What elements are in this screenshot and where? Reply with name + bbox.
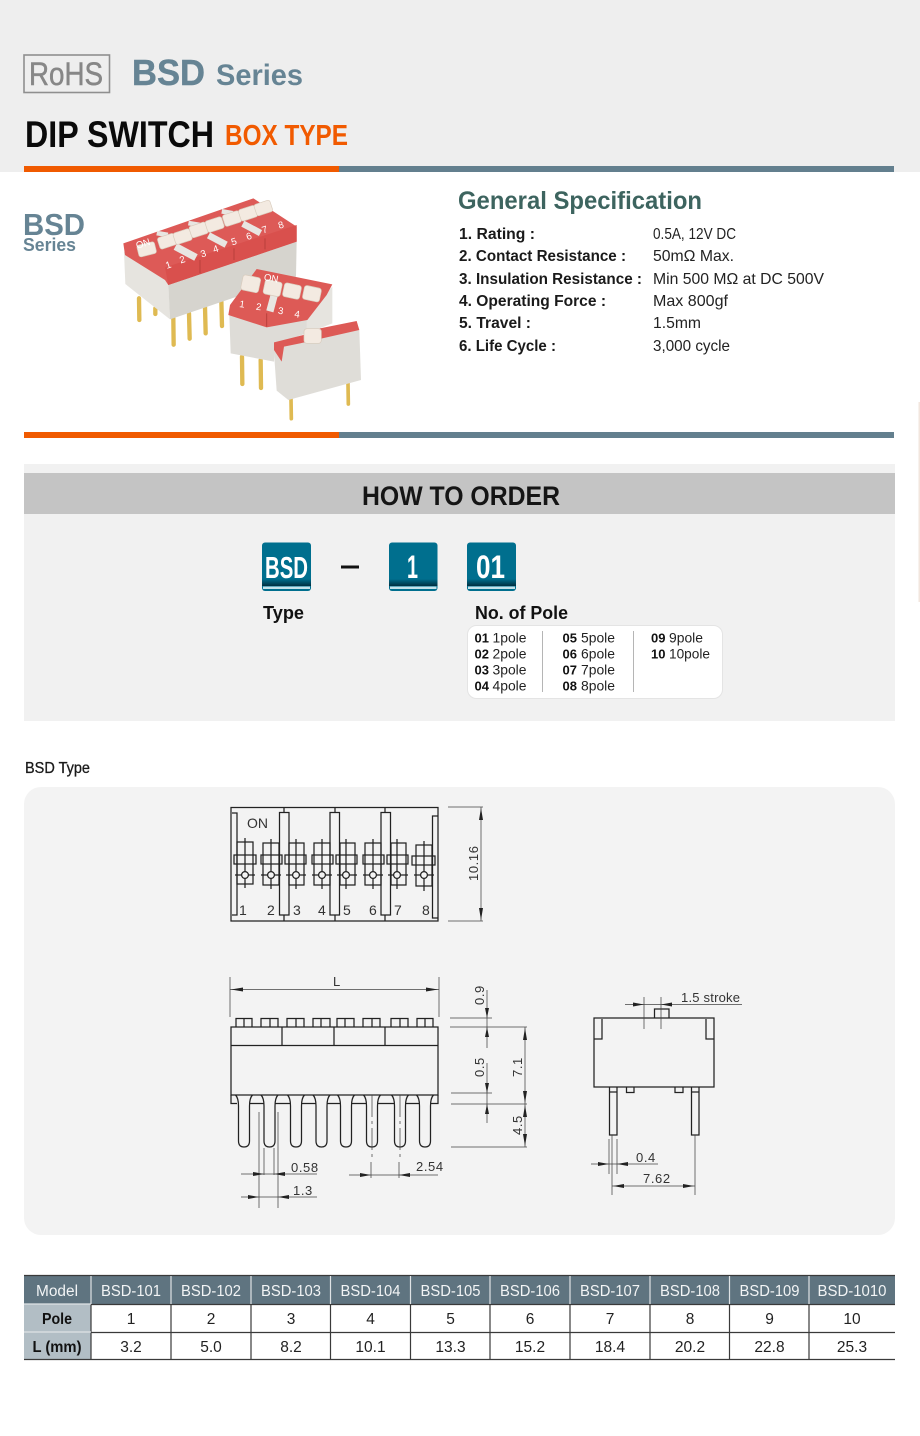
code box: 1 [389, 542, 438, 591]
product photo: DIP switches: 2 [178, 254, 187, 266]
row: L (mm): 25.3 [837, 1339, 867, 1356]
row: Pole: 5 [446, 1311, 455, 1328]
spec row 5 [459, 315, 701, 332]
row: L (mm): 22.8 [754, 1339, 785, 1356]
row: Pole: 2 [207, 1311, 215, 1328]
spec row 6: 3,000 cycle [653, 338, 730, 355]
row: Model: BSD-107 [580, 1283, 640, 1300]
spec row 3: Min 500 MΩ at DC 500V [653, 271, 824, 288]
row: Pole: 7 [606, 1311, 614, 1328]
code box: BSD: BSD [265, 550, 308, 585]
pole list: 5pole [581, 630, 615, 646]
spec row 4 [459, 293, 729, 310]
spec row 6 [459, 338, 730, 355]
switch numbers: 8 [422, 902, 430, 918]
drawing: top view [231, 807, 483, 921]
pole list: 03 [474, 662, 489, 678]
pole list: 10 [651, 646, 665, 662]
row: Pole: 3 [287, 1311, 295, 1328]
product photo: DIP switches: 6 [245, 231, 253, 243]
spec row 1: 0.5A, 12V DC [653, 226, 736, 243]
series subtitle: Series [216, 59, 303, 92]
dimension 7.62 [612, 1135, 695, 1195]
spec row 5: 5. Travel : [459, 315, 531, 332]
row: L (mm): 10.1 [355, 1339, 386, 1356]
large switch pins [139, 298, 222, 345]
product photo: DIP switches: 3 [277, 306, 284, 317]
switch numbers [239, 902, 430, 918]
spec heading: General Specification [458, 187, 702, 215]
side label: BSD Series: BSD [23, 207, 85, 242]
spec row 5: 1.5mm [653, 315, 701, 332]
pole list: 02 [474, 646, 489, 662]
dimension 0.4: 0.4 [636, 1150, 656, 1165]
switch numbers: 6 [369, 902, 377, 918]
row: L (mm): 8.2 [280, 1339, 302, 1356]
drawing: front view [230, 974, 527, 1208]
pole list: 8pole [581, 678, 615, 694]
row: Model: BSD-109 [740, 1283, 800, 1300]
label: Type: Type [263, 603, 304, 623]
spec row 2: 50mΩ Max. [653, 248, 734, 265]
pole list: 2pole [492, 646, 527, 662]
label: No. of Pole: No. of Pole [475, 603, 568, 623]
switch numbers: 2 [267, 902, 275, 918]
dimensions right [450, 985, 527, 1147]
dimensions right: 7.1 [510, 1057, 525, 1077]
spec row 1: 1. Rating : [459, 226, 535, 243]
series title: BSD [132, 52, 205, 93]
label ON: ON [247, 815, 268, 831]
pole list: 4pole [492, 678, 527, 694]
switches [234, 838, 435, 891]
code box: 1: 1 [407, 549, 418, 585]
side label: BSD Series: Series [23, 235, 76, 255]
switch numbers: 5 [343, 902, 351, 918]
dimensions bottom: 2.54 [416, 1159, 444, 1174]
dimensions right: 4.5 [510, 1115, 525, 1135]
product photo: DIP switches: ON [135, 237, 152, 252]
dimension L: L [333, 974, 341, 989]
code box: 01 [467, 542, 516, 591]
row: Pole: 9 [765, 1311, 774, 1328]
heading: BSD Type: BSD Type [25, 760, 90, 777]
pole list: 07 [562, 662, 577, 678]
product photo: DIP switches: 7 [261, 224, 269, 236]
drawing: side view [591, 990, 742, 1195]
row: Model: BSD-1010 [818, 1283, 887, 1300]
row: Pole: Pole [42, 1311, 72, 1328]
row: L (mm): 18.4 [595, 1339, 625, 1356]
panel: general specification [458, 187, 824, 355]
product photo: DIP switches: 5 [230, 236, 238, 248]
row: Model: BSD-106 [500, 1283, 560, 1300]
row: Pole: 4 [366, 1311, 375, 1328]
spec row 3 [459, 271, 824, 288]
row: Model: BSD-103 [261, 1283, 321, 1300]
dimensions right: 0.9 [472, 985, 487, 1005]
spec row 2: 2. Contact Resistance : [459, 248, 626, 265]
row: L (mm): 13.3 [435, 1339, 466, 1356]
row: L (mm) [32, 1339, 867, 1356]
dimensions bottom: 0.58 [291, 1160, 319, 1175]
table grid [24, 1276, 895, 1360]
dimension 10.16: 10.16 [466, 845, 481, 881]
pins [236, 1095, 434, 1147]
row: Pole: 6 [526, 1311, 534, 1328]
row: Model: BSD-105 [420, 1283, 480, 1300]
dimension stroke: 1.5 stroke [681, 990, 740, 1005]
row: L (mm): 5.0 [200, 1339, 222, 1356]
dimension 0.4 [591, 1139, 658, 1174]
spec row 3: 3. Insulation Resistance : [459, 271, 642, 288]
pole list [468, 626, 722, 698]
dimensions bottom [241, 1112, 444, 1208]
dash [341, 566, 359, 568]
dimension L [230, 974, 439, 1017]
section rule [24, 432, 894, 438]
pole list: 10pole [669, 646, 710, 662]
pole list: 09 [651, 630, 665, 646]
product photo: DIP switches: 1 [239, 299, 245, 311]
header band [0, 0, 920, 172]
row: Model: BSD-101 [101, 1283, 161, 1300]
product photo: DIP switches: 4 [294, 309, 301, 321]
pole list: 08 [562, 678, 577, 694]
switch numbers: 1 [239, 902, 247, 918]
product photo: DIP switches: ON [263, 272, 279, 286]
row: L (mm): 3.2 [120, 1339, 142, 1356]
pole list: 6pole [581, 646, 615, 662]
spec row 2 [459, 248, 734, 265]
switch numbers: 3 [293, 902, 301, 918]
row: Pole: 10 [843, 1311, 861, 1328]
row: Pole: 1 [127, 1311, 135, 1328]
dimension 7.62: 7.62 [643, 1171, 671, 1186]
switch numbers: 7 [394, 902, 402, 918]
panel: how to order [24, 464, 895, 721]
product photo: DIP switches: 2 [255, 302, 262, 313]
code box: BSD [262, 542, 311, 591]
code box: 01: 01 [476, 549, 505, 585]
how to order band [24, 473, 895, 514]
row: L (mm): 20.2 [675, 1339, 705, 1356]
table fills [24, 1276, 895, 1360]
header rule [24, 166, 894, 172]
body [231, 1027, 438, 1095]
product photo: DIP switches: 3 [199, 248, 208, 260]
pole list: 05 [562, 630, 577, 646]
row: Pole: 8 [686, 1311, 694, 1328]
pole list: 06 [562, 646, 577, 662]
spec row 6: 6. Life Cycle : [459, 338, 556, 355]
row: Model [36, 1283, 887, 1300]
pole list: 7pole [581, 662, 615, 678]
pole list: 01 [474, 630, 489, 646]
row: Model: Model [36, 1283, 78, 1300]
product photo: DIP switches: 1 [164, 260, 173, 272]
how to order heading: HOW TO ORDER [362, 481, 560, 511]
dimension stroke [625, 990, 742, 1029]
spec row 4: Max 800gf [653, 293, 729, 310]
dimension 10.16 [448, 807, 483, 921]
row: L (mm): L (mm) [32, 1339, 82, 1356]
medium switch pins [242, 357, 261, 388]
dimensions right: 0.5 [472, 1057, 487, 1077]
pole list: 3pole [492, 662, 527, 678]
small switch pins [291, 383, 348, 419]
row: L (mm): 15.2 [515, 1339, 545, 1356]
pole list: 9pole [669, 630, 703, 646]
row: Model: BSD-104 [340, 1283, 401, 1300]
panel: dimension drawings [24, 787, 895, 1235]
switch numbers: 4 [318, 902, 326, 918]
spec row 1 [459, 226, 736, 243]
product photo: DIP switches [123, 198, 361, 419]
row: Model: BSD-102 [181, 1283, 241, 1300]
RoHS badge: RoHS [29, 56, 103, 92]
row: Model: BSD-108 [660, 1283, 720, 1300]
pole list: 1pole [492, 630, 527, 646]
dimensions bottom: 1.3 [293, 1183, 313, 1198]
title: DIP SWITCH: DIP SWITCH [25, 114, 214, 155]
subtitle: BOX TYPE: BOX TYPE [225, 120, 348, 152]
spec row 4: 4. Operating Force : [459, 293, 606, 310]
product photo: DIP switches: 4 [212, 243, 221, 256]
table: model dimensions [24, 1276, 895, 1360]
pole list: 04 [474, 678, 490, 694]
row: Pole [42, 1311, 861, 1328]
buttons [236, 1018, 433, 1027]
product photo: DIP switches: 8 [277, 220, 285, 232]
